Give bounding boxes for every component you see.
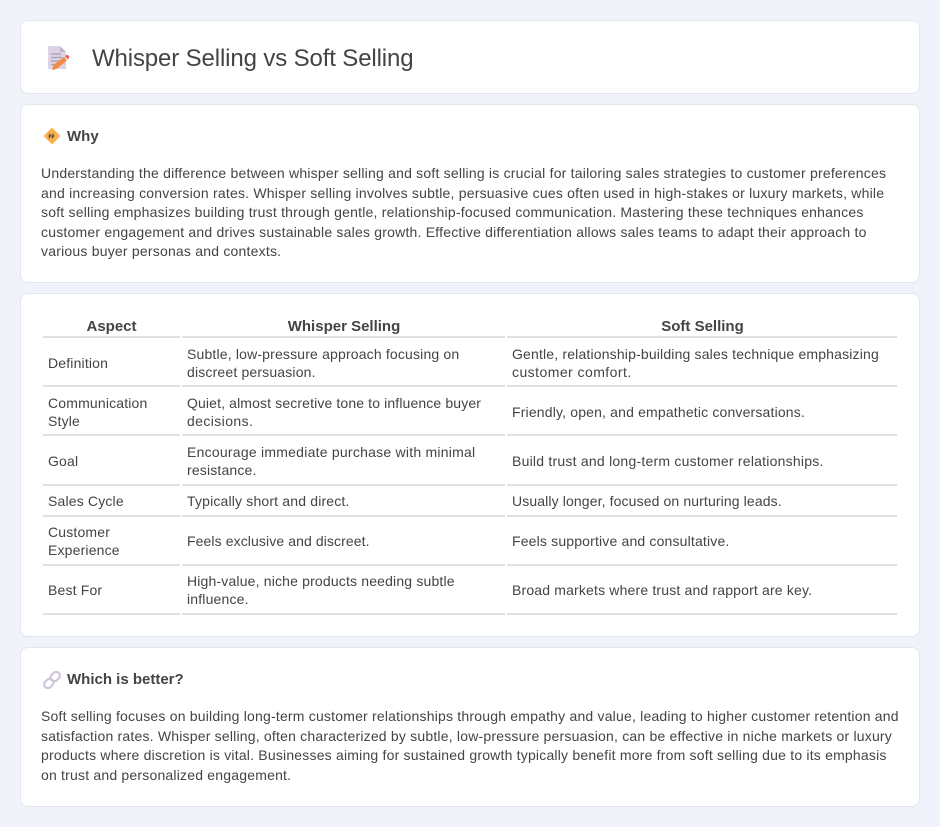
row: communication style: Quiet, almost secretive tone to influence buyer <box>187 395 481 411</box>
row: definition <box>48 346 879 380</box>
text block: why: various buyer personas and contexts. <box>41 243 281 259</box>
row: goal: Build trust and long-term customer relationships. <box>512 453 824 469</box>
column header: whisper selling: Whisper Selling <box>288 318 400 335</box>
text block: which is better: satisfaction rates. Whisper selling, often characterized by subtle, low-pressure persuasion, can be effective in niche markets or luxury <box>41 728 892 744</box>
row: sales cycle: Sales Cycle <box>48 493 124 509</box>
title: Whisper Selling vs Soft Selling <box>92 45 413 72</box>
row: best for <box>48 573 812 607</box>
row: goal <box>48 444 824 478</box>
row: definition: discreet persuasion. <box>187 364 316 380</box>
row: best for: Best For <box>48 582 102 598</box>
text block: which is better: Soft selling focuses on building long-term customer relationships through empathy and value, leading to higher customer retention and <box>41 708 899 724</box>
text block: why: customer engagement and drives sustainable sales growth. Effective differentiation allows sales teams to adapt their approach to <box>41 224 867 240</box>
row: best for: influence. <box>187 591 249 607</box>
row: definition: Subtle, low-pressure approach focusing on <box>187 346 459 362</box>
row: communication style <box>48 395 805 429</box>
text block: why <box>41 165 886 259</box>
row: definition: Gentle, relationship-building sales technique emphasizing <box>512 346 879 362</box>
text block: why: Understanding the difference between whisper selling and soft selling is crucial for tailoring sales strategies to customer preferences <box>41 165 886 181</box>
icon: document with pencil <box>48 46 70 70</box>
row: customer experience <box>48 524 729 558</box>
icon: warning diamond <box>44 128 60 144</box>
text block: why: soft selling emphasizes building trust through gentle, relationship-focused communication. Mastering these techniques enhances <box>41 204 864 220</box>
icon: link <box>43 671 61 689</box>
row: best for: High-value, niche products needing subtle <box>187 573 455 589</box>
row: communication style: decisions. <box>187 413 253 429</box>
row: customer experience: Experience <box>48 542 120 558</box>
row: goal: resistance. <box>187 462 257 478</box>
row: sales cycle <box>48 493 782 509</box>
row: communication style: Communication <box>48 395 147 411</box>
heading: which is better: Which is better? <box>67 671 184 688</box>
row: sales cycle: Usually longer, focused on nurturing leads. <box>512 493 782 509</box>
text block: which is better <box>41 708 899 783</box>
row: definition: customer comfort. <box>512 364 632 380</box>
row: customer experience: Feels exclusive and discreet. <box>187 533 370 549</box>
panel: header <box>20 20 920 94</box>
row: best for: Broad markets where trust and rapport are key. <box>512 582 812 598</box>
text block: which is better: on trust and personalized engagement. <box>41 767 291 783</box>
panel: which is better <box>20 647 920 807</box>
row: communication style: Style <box>48 413 80 429</box>
row: customer experience: Customer <box>48 524 110 540</box>
row: communication style: Friendly, open, and empathetic conversations. <box>512 404 805 420</box>
text block: why: and increasing conversion rates. Whisper selling involves subtle, persuasive cues often used in high-stakes or luxury markets, while <box>41 185 884 201</box>
table: comparison <box>43 318 897 615</box>
panel: why <box>20 104 920 283</box>
row: sales cycle: Typically short and direct. <box>187 493 350 509</box>
row: customer experience: Feels supportive and consultative. <box>512 533 729 549</box>
text block: which is better: products where discretion is vital. Businesses aiming for sustained growth typically benefit more from soft selling due to its emphasis <box>41 747 887 763</box>
row: goal: Goal <box>48 453 78 469</box>
heading: why: Why <box>67 128 99 145</box>
row: goal: Encourage immediate purchase with minimal <box>187 444 475 460</box>
column header: soft selling: Soft Selling <box>661 318 744 335</box>
row: definition: Definition <box>48 355 108 371</box>
panel: comparison table <box>20 293 920 637</box>
column header: aspect: Aspect <box>86 318 137 335</box>
